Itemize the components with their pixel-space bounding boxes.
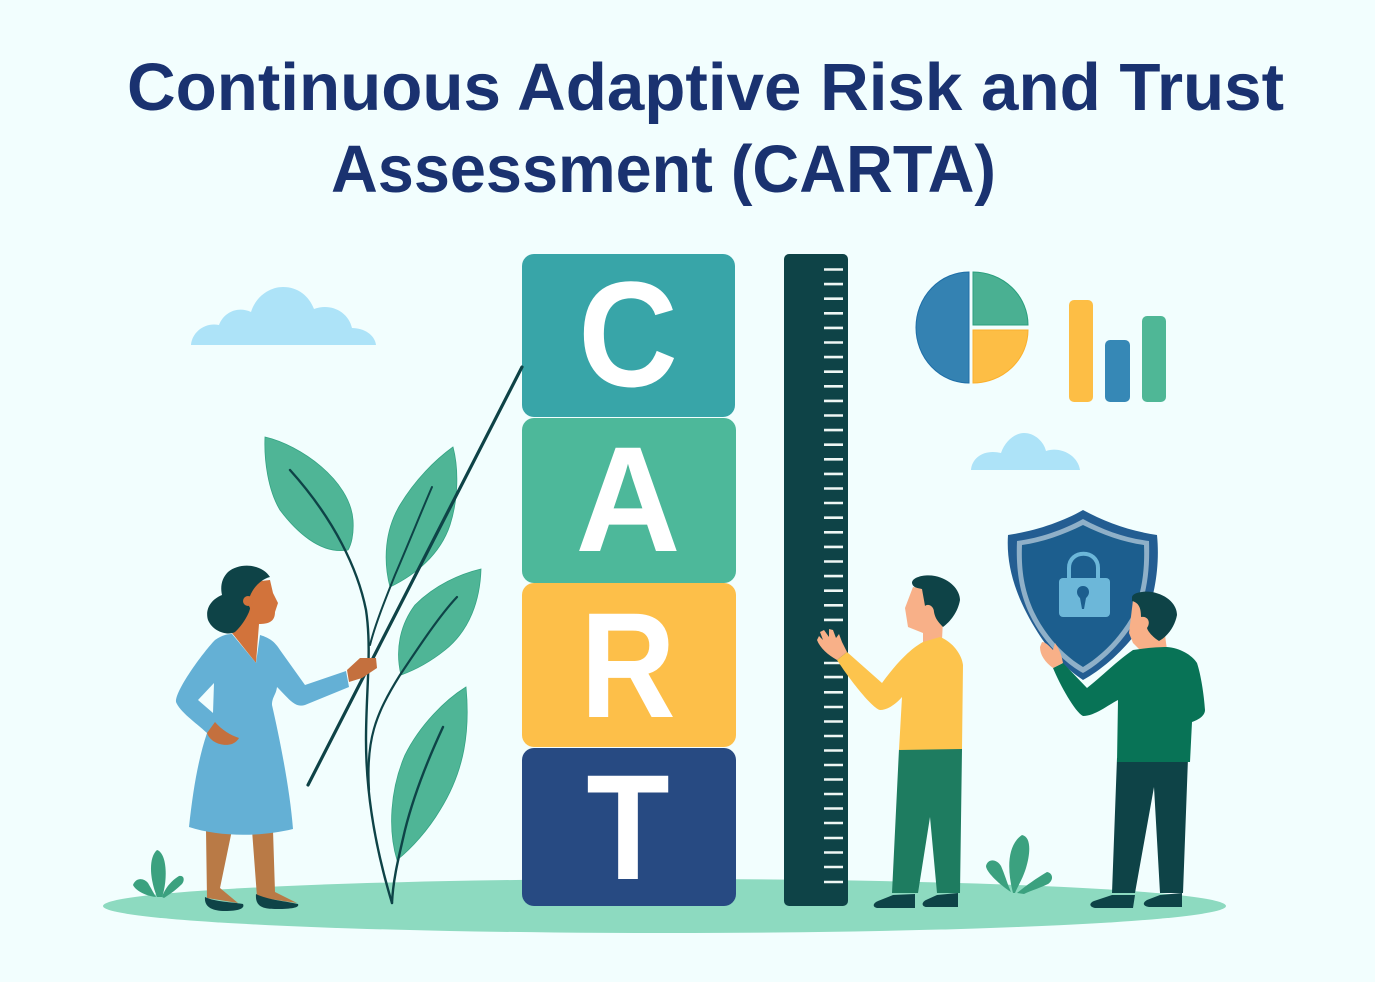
block T: T xyxy=(586,744,670,911)
man hand xyxy=(817,629,847,660)
shield inner xyxy=(1022,525,1144,667)
stems xyxy=(290,367,522,903)
bar chart xyxy=(1069,300,1166,402)
man shoes xyxy=(874,893,958,908)
block C: C xyxy=(578,251,678,418)
shield with lock xyxy=(1008,510,1158,680)
shield outer xyxy=(1008,510,1158,680)
block A xyxy=(522,416,736,583)
shield ring xyxy=(1017,519,1149,673)
title xyxy=(127,50,1284,207)
block C xyxy=(522,251,735,418)
woman hair xyxy=(207,566,270,634)
woman hand holding stem xyxy=(347,658,377,682)
man face and neck xyxy=(1129,600,1167,650)
woman hand on hip xyxy=(207,722,239,745)
woman shoes xyxy=(205,894,298,911)
man face and neck xyxy=(905,587,943,645)
ruler xyxy=(784,254,848,906)
woman dress xyxy=(176,634,349,835)
woman ear xyxy=(243,596,253,606)
man hair xyxy=(912,575,960,627)
cloud left xyxy=(191,287,376,345)
title: Continuous Adaptive Risk and Trust xyxy=(127,50,1284,125)
block T xyxy=(522,744,736,911)
arm gap xyxy=(198,683,214,713)
plant with leaves xyxy=(265,367,522,903)
ground ellipse xyxy=(103,879,1226,933)
man pants xyxy=(1112,758,1188,893)
woman legs xyxy=(206,830,297,903)
man hand xyxy=(1040,642,1063,668)
person: man holding shield xyxy=(1040,592,1205,908)
title: Assessment (CARTA) xyxy=(331,132,996,207)
cloud right xyxy=(971,433,1080,470)
block A: A xyxy=(575,416,681,583)
block R xyxy=(522,581,736,749)
man sweater xyxy=(1053,647,1205,762)
man pants xyxy=(892,749,962,893)
small plant left xyxy=(133,850,184,898)
man shoes xyxy=(1090,893,1182,908)
block R: R xyxy=(580,581,676,749)
pie chart xyxy=(916,272,1028,383)
padlock xyxy=(1059,554,1110,617)
leaves xyxy=(265,437,481,860)
small plant right xyxy=(986,835,1052,894)
man hair xyxy=(1132,592,1177,641)
CART letter blocks xyxy=(522,251,736,911)
person: man measuring ruler xyxy=(817,575,963,908)
woman neck and face xyxy=(232,580,278,663)
person: woman holding plant xyxy=(176,566,377,911)
man sweater xyxy=(837,637,963,750)
